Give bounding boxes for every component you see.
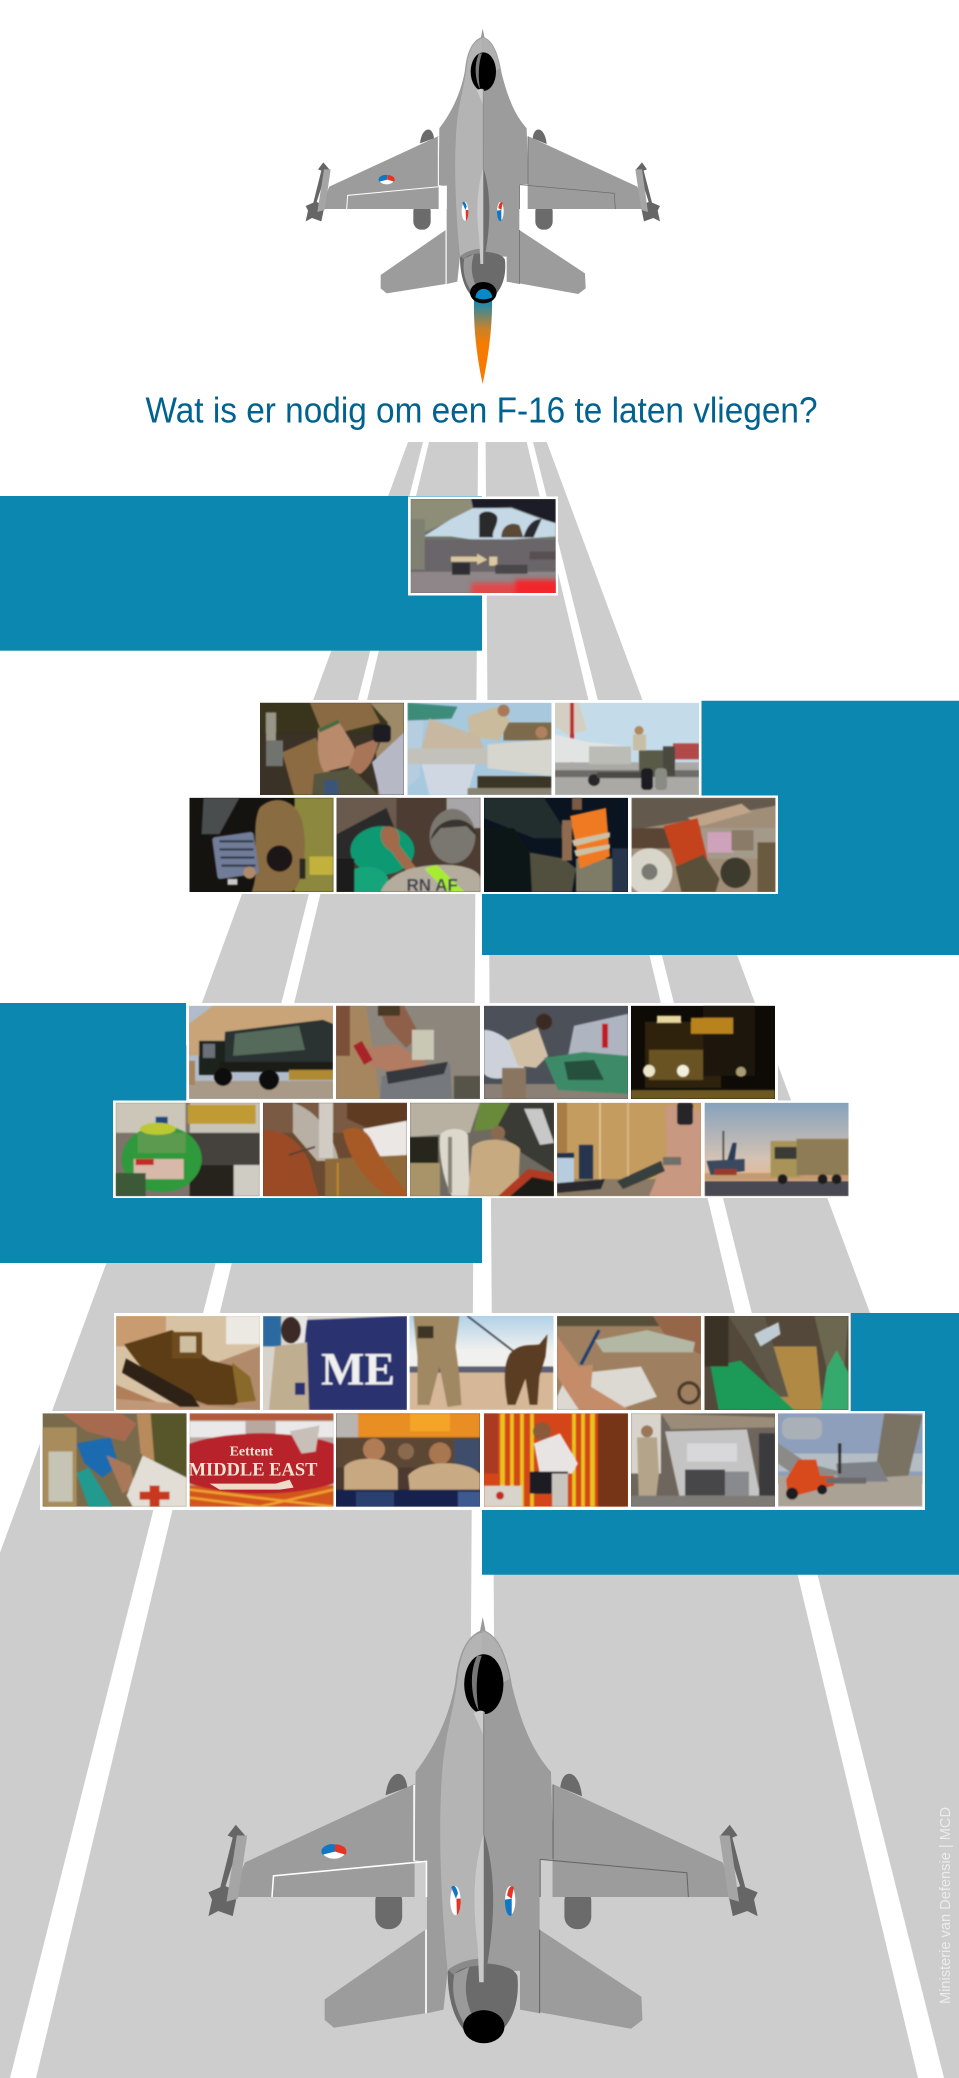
photo: fire truck at sunset (704, 1102, 849, 1196)
photo: fins on a bomb (408, 702, 552, 795)
photo: forklift and transport aircraft (778, 1413, 922, 1507)
photo: orange safety vest (484, 798, 628, 892)
photo: hand on keypad (336, 1006, 480, 1099)
photo: bulldozer (116, 1316, 260, 1410)
panel: blue block 4 (482, 1313, 959, 1575)
photo: military police sleeve: ME (321, 1345, 395, 1396)
photo: technician with green helmet: RN AF (407, 876, 458, 895)
photo: dog handler in desert (410, 1316, 554, 1410)
photo: technician with green helmet (336, 798, 480, 895)
photo: green tank and sign (116, 1102, 260, 1196)
photo: engine maintenance (410, 1102, 554, 1196)
photo: truck at night (631, 1006, 775, 1099)
photo: under the landing gear (632, 798, 776, 892)
panel: blue block 3 (0, 1003, 482, 1263)
photo: first aid kit (42, 1413, 187, 1507)
photo: covering a bomb with green tarp (484, 1006, 628, 1099)
panel: blue block 1 (0, 496, 482, 651)
photo: Eettent Middle East sign: MIDDLE EAST (189, 1460, 318, 1481)
photo: Eettent Middle East sign: Eettent (230, 1443, 273, 1459)
photo: counting money (557, 1316, 701, 1410)
runway (0, 442, 959, 2078)
photo: military police sleeve (263, 1316, 407, 1410)
photo: pilot in cockpit (410, 499, 556, 593)
photo: man inspecting fluid (263, 1102, 407, 1196)
photo: bomb loader (555, 702, 699, 795)
photo: fitness on striped wall (484, 1413, 628, 1507)
photo: hands closing pocket (260, 702, 404, 795)
photo frames (40, 496, 925, 1510)
icon: F-16 on the runway (208, 1617, 758, 2043)
photo: green bags on scale (704, 1316, 848, 1410)
photo: fuel tanker (189, 1006, 333, 1099)
photo: office and telephone (557, 1102, 701, 1196)
photo: cargo under netting (631, 1413, 775, 1507)
icon: F-16 top with afterburner flame (306, 28, 660, 384)
title: Wat is er nodig om een F-16 te laten vliegen? (146, 390, 818, 430)
panel: blue block 2 (482, 701, 959, 955)
photo: RNLAF briefing (336, 1413, 480, 1507)
credit text: Ministerie van Defensie | MCD (938, 1807, 954, 2004)
photo: cockpit keypad (190, 798, 334, 892)
photo: Eettent Middle East sign (189, 1413, 334, 1507)
